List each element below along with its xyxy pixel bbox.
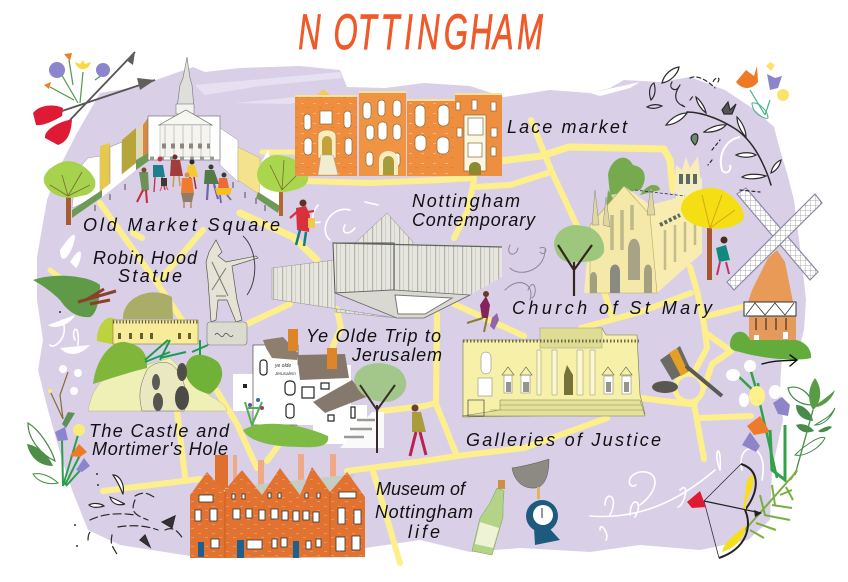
Galleries of Justice: [462, 328, 645, 417]
label: Nottingham: Nottingham: [375, 502, 473, 522]
tree by the inn: [354, 363, 406, 453]
Lace Market doors and stairs: [318, 130, 336, 158]
arrow by windmill: [762, 355, 797, 366]
Church of St Mary: [584, 156, 702, 293]
white brush strokes on paint: [195, 72, 640, 104]
dashed decoration bottom left: [88, 475, 184, 556]
Lace Market windows: [304, 100, 497, 171]
Robin Hood statue: [206, 236, 258, 345]
green bush at windmill base: [730, 332, 811, 360]
The Castle and Mortimer's Hole: [88, 292, 227, 411]
label: Nottingham: Nottingham: [412, 191, 520, 211]
fern: [744, 470, 797, 538]
decoration: white swirls: [50, 202, 763, 540]
flowers top right: [736, 62, 789, 118]
tree: left of square: [44, 161, 95, 225]
church trees behind: [605, 158, 660, 220]
roundabout: [675, 374, 703, 402]
right row of houses: [220, 128, 280, 213]
label: Robin Hood: Robin Hood: [93, 248, 198, 268]
tree: right of square: [257, 155, 308, 216]
label: Contemporary: Contemporary: [412, 210, 536, 230]
small ink dots at left: [59, 311, 99, 547]
label: Statue: Statue: [118, 266, 182, 286]
windmill sails: [737, 188, 818, 280]
man in teal: [716, 236, 730, 275]
label: Jerusalem: Jerusalem: [351, 345, 442, 365]
label: Mortimer's Hole: Mortimer's Hole: [92, 439, 228, 459]
label: Old Market Square: Old Market Square: [83, 215, 280, 235]
tree by church: [554, 225, 604, 296]
flowers top left with arrows: [33, 52, 155, 145]
grey swirl by church: [505, 245, 546, 300]
left row of houses: [72, 115, 150, 218]
lavender paint background: [37, 66, 806, 558]
Ye Olde Trip to Jerusalem inn: [233, 329, 384, 448]
dog walker: [467, 291, 499, 332]
label: Lace market: Lace market: [507, 117, 628, 137]
leaves right: [788, 378, 835, 475]
flowers left bottom: [27, 365, 90, 486]
Lace Market buildings: [295, 89, 502, 176]
label: The Castle and: The Castle and: [89, 421, 230, 441]
label: Ye Olde Trip to: Ye Olde Trip to: [306, 326, 441, 346]
windmill: [727, 188, 822, 351]
Nottingham Contemporary building: [272, 213, 502, 318]
roads: [50, 120, 751, 563]
label: Museum of: Museum of: [376, 479, 467, 499]
walker in green coat: [410, 404, 426, 456]
daisies and plants right: [726, 360, 835, 538]
wine bottle: [472, 480, 505, 555]
woman with shopping bag: [290, 200, 315, 246]
label: Galleries of Justice: Galleries of Justice: [466, 430, 661, 450]
yellow tree: [681, 188, 744, 280]
bollards: [95, 182, 265, 211]
gavel: [652, 346, 722, 396]
white curl by branch: [721, 137, 740, 172]
decoration: white leaves near left: [48, 235, 90, 354]
Museum of Nottingham Life building: [190, 454, 365, 558]
label: life: life: [408, 522, 440, 542]
branch top right: [647, 67, 781, 192]
Ye Olde Trip to Jerusalem inn: Jerusalem: [274, 371, 296, 376]
Old Market Square: [72, 57, 280, 218]
Robin Hood hat with feather: [33, 276, 116, 317]
council house with tower: [148, 57, 220, 160]
bow and arrow: [687, 464, 762, 558]
weighing scale: [512, 459, 560, 545]
title: NOTTINGHAM: [298, 3, 543, 60]
Ye Olde Trip to Jerusalem inn: ye olde: [274, 363, 291, 369]
label: Church of St Mary: Church of St Mary: [512, 298, 713, 318]
crowd: [137, 154, 232, 208]
